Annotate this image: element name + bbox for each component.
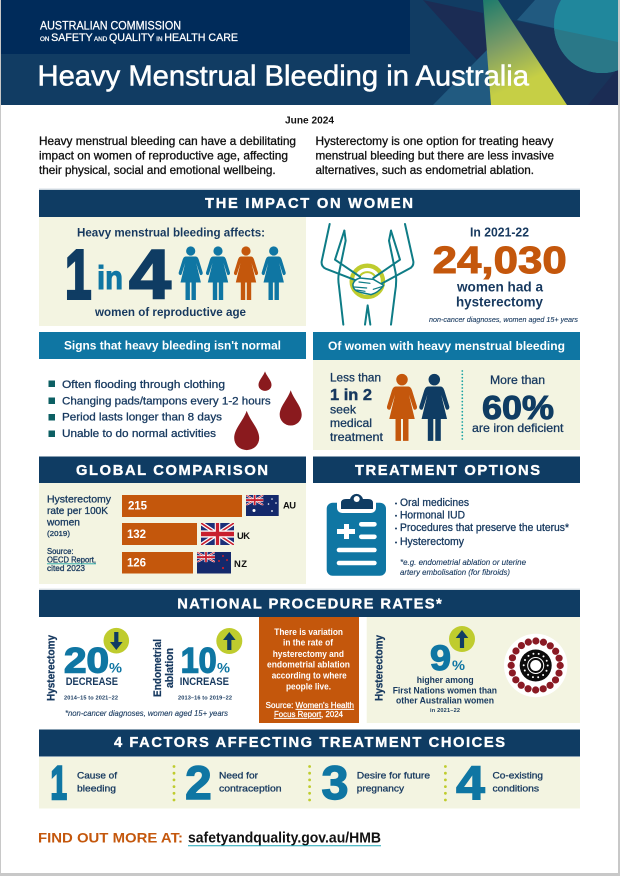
- list: signs: Often flooding through clothing: [62, 379, 225, 391]
- list: signs: Period lasts longer than 8 days: [62, 412, 222, 424]
- flag: New Zealand: [197, 552, 231, 574]
- statistic: 9% higher: other Australian women: [396, 695, 494, 706]
- intro paragraph right: menstrual bleeding but there are less invasive: [316, 150, 554, 163]
- factor 1: cause of bleeding: bleeding: [77, 783, 116, 794]
- factor 2: need for contraception: contraception: [219, 783, 282, 794]
- callout: variation by location: hysterectomy and: [273, 649, 344, 659]
- text: less than 1 in 2: seek: [330, 404, 356, 417]
- section heading: of women with hmb: Of women with heavy menstrual bleeding: [328, 339, 565, 353]
- statistic: 24,030 hysterectomies: hysterectomy: [456, 294, 543, 310]
- factor 4: co-existing conditions: conditions: [492, 783, 539, 794]
- icon: medical clipboard: [327, 494, 386, 576]
- factor 4: co-existing conditions: Co-existing: [492, 769, 543, 780]
- statistic: 9% higher: First Nations women than: [393, 684, 497, 695]
- header geometric artwork: [423, 0, 620, 105]
- bar: NZ 126: [122, 552, 247, 574]
- statistic: 1 in 4: 1: [65, 236, 92, 314]
- statistic: endometrial ablation 10% increase: Endometrial: [152, 639, 164, 697]
- callout: variation by location: [259, 617, 359, 723]
- statistic: endometrial ablation 10% increase: 10: [181, 641, 217, 680]
- list: treatment options: Oral medicines: [400, 497, 469, 509]
- statistic: 60% iron deficient: More than: [490, 373, 545, 387]
- statistic: hysterectomy 20% decrease: %: [109, 659, 123, 675]
- label: hysterectomy rate: Hysterectomy: [47, 495, 112, 506]
- note: non-cancer diagnoses: non-cancer diagnoses, women aged 15+ years: [429, 315, 578, 324]
- section heading: the impact on women: [39, 190, 580, 217]
- statistic: 9% higher: in 2021–22: [430, 708, 460, 714]
- statistic: 1 in 4: 4: [129, 236, 171, 314]
- section heading: global comparison: GLOBAL COMPARISON: [76, 463, 268, 479]
- intro paragraph left: their physical, social and emotional wellbeing.: [39, 164, 276, 177]
- text: less than 1 in 2: treatment: [330, 431, 384, 444]
- note: treatment footnote: *e.g. endometrial ablation or uterine: [400, 558, 527, 567]
- note: treatment footnote: [400, 558, 527, 577]
- intro paragraph left: impact on women of reproductive age, affecting: [39, 150, 288, 163]
- bar: UK 132: 132: [127, 529, 146, 541]
- label: hysterectomy rate: [46, 495, 112, 538]
- section heading: signs: [39, 332, 306, 359]
- source: OECD: [47, 547, 96, 573]
- label: hysterectomy rate: women: [46, 517, 80, 528]
- source: OECD: OECD Report,: [47, 556, 96, 565]
- callout: variation by location: people live.: [286, 681, 331, 691]
- statistic: hysterectomy 20% decrease: Hysterectomy: [46, 635, 58, 701]
- statistic: 1 in 4: in: [97, 259, 123, 296]
- intro paragraph right: alternatives, such as endometrial ablation.: [316, 164, 534, 177]
- callout: variation by location: in the rate of: [283, 638, 333, 648]
- statistic: hysterectomy 20% decrease: [46, 628, 129, 702]
- factor 3: desire for future pregnancy: [322, 756, 430, 809]
- list: signs: Unable to do normal activities: [62, 428, 216, 440]
- statistic: endometrial ablation 10% increase: %: [217, 659, 231, 675]
- factor 1: cause of bleeding: [50, 756, 117, 809]
- callout: variation by location: according to where: [272, 670, 347, 680]
- bar: Australia 215: 215: [128, 500, 148, 512]
- icon: four women, one highlighted: [179, 246, 286, 300]
- factor 2: need for contraception: [185, 756, 282, 809]
- source: Women's Health Focus Report: Source: Women's Health: [266, 701, 354, 710]
- panel: First Nations women: Hysterectomy: [374, 635, 386, 701]
- text: less than 1 in 2: medical: [330, 417, 372, 430]
- list: signs: [48, 379, 271, 440]
- logo text: ON SAFETY AND QUALITY IN HEALTH CARE: [40, 32, 238, 44]
- intro paragraph left: [39, 135, 296, 177]
- bar: NZ 126: 126: [127, 558, 146, 570]
- panel: 1 in 4 women: [39, 217, 306, 326]
- factor 3: desire for future pregnancy: pregnancy: [357, 783, 404, 794]
- statistic: 24,030 hysterectomies: women had a: [456, 279, 543, 295]
- list: treatment options: Hysterectomy: [400, 536, 465, 548]
- panel: treatment seeking and iron deficiency: [313, 360, 580, 450]
- intro paragraph right: Hysterectomy is one option for treating heavy: [316, 135, 554, 148]
- list: treatment options: Procedures that preserve the uterus*: [400, 522, 569, 534]
- icon: two women: [387, 374, 449, 441]
- panel: First Nations women: [367, 617, 580, 723]
- list: treatment options: [395, 497, 569, 548]
- callout: variation by location: endometrial ablation: [267, 660, 350, 670]
- text: less than 1 in 2: [330, 372, 384, 444]
- statistic: 60% iron deficient: are iron deficient: [472, 422, 564, 435]
- statistic: 9% higher: %: [452, 657, 466, 673]
- icon: First Nations dot artwork: [504, 634, 567, 697]
- callout: variation by location: There is variation: [274, 627, 343, 637]
- statistic: hysterectomy 20% decrease: DECREASE: [66, 676, 118, 688]
- factor 2: need for contraception: Need for: [219, 769, 258, 780]
- section heading: treatment options: TREATMENT OPTIONS: [355, 463, 540, 479]
- section heading: the impact on women: THE IMPACT ON WOMEN: [205, 196, 413, 212]
- source: Women's Health Focus Report: [266, 701, 354, 719]
- bar: Australia 215: [122, 495, 296, 517]
- factor 1: cause of bleeding: 1: [50, 756, 67, 809]
- flag: Australia: [246, 495, 279, 516]
- source: Women's Health Focus Report: Focus Report, 2024: [274, 710, 344, 719]
- factor 1: cause of bleeding: Cause of: [77, 769, 117, 780]
- flag: UK: [201, 523, 234, 545]
- bar: UK 132: [122, 523, 250, 545]
- statistic: 9% higher: [393, 639, 497, 714]
- footer: find out more: FIND OUT MORE AT:: [38, 830, 183, 846]
- icon: up arrow: [216, 628, 242, 654]
- section heading: of women with hmb: [313, 332, 580, 360]
- statistic: 60% iron deficient: [472, 373, 564, 435]
- statistic: hysterectomy 20% decrease: 2014–15 to 2021–22: [64, 696, 118, 702]
- header banner: [1, 0, 620, 105]
- list: treatment options: Hormonal IUD: [400, 509, 465, 521]
- icon: up arrow: [449, 626, 475, 652]
- intro paragraph right: [316, 135, 554, 177]
- note: treatment footnote: artery embolisation (for fibroids): [400, 568, 510, 577]
- source: OECD: Source:: [47, 547, 74, 556]
- statistic: endometrial ablation 10% increase: 2013–16 to 2019–22: [178, 696, 232, 702]
- label: hysterectomy rate: (2019): [47, 529, 70, 538]
- logo text: [40, 20, 238, 44]
- icon: blood drops: [234, 371, 302, 450]
- text: less than 1 in 2: 1 in 2: [330, 387, 372, 404]
- section heading: treatment options: [313, 456, 580, 483]
- section heading: national procedure rates: [39, 590, 580, 617]
- section heading: 4 factors: 4 FACTORS AFFECTING TREATMENT CHOICES: [114, 735, 505, 751]
- statistic: endometrial ablation 10% increase: [152, 628, 242, 702]
- statistic: hysterectomy 20% decrease: 20: [64, 641, 109, 680]
- heading: affects: Heavy menstrual bleeding affects:: [77, 226, 265, 240]
- footer: find out more: safetyandquality.gov.au/HMB: [188, 831, 381, 847]
- factor 2: need for contraception: 2: [185, 756, 212, 809]
- label: hysterectomy rate: rate per 100K: [47, 506, 108, 517]
- logo text: AUSTRALIAN COMMISSION: [40, 20, 181, 32]
- statistic: 60% iron deficient: 60%: [482, 389, 554, 426]
- statistic: 9% higher: higher among: [417, 674, 474, 685]
- icon: down arrow: [104, 628, 129, 654]
- statistic: endometrial ablation 10% increase: INCREASE: [180, 676, 229, 688]
- section heading: global comparison: [39, 456, 306, 483]
- bar: NZ 126: NZ: [234, 558, 247, 569]
- factor 4: co-existing conditions: [456, 756, 543, 809]
- statistic: 24,030 hysterectomies: In 2021-22: [470, 226, 529, 240]
- factor 3: desire for future pregnancy: 3: [322, 756, 348, 809]
- source: OECD: cited 2023: [47, 564, 85, 573]
- statistic: 24,030 hysterectomies: [429, 226, 578, 324]
- icon: hands over abdomen: [322, 224, 413, 325]
- factor 3: desire for future pregnancy: Desire for future: [357, 769, 430, 780]
- statistic: 24,030 hysterectomies: 24,030: [433, 240, 567, 282]
- factor 4: co-existing conditions: 4: [456, 756, 485, 809]
- bar: Australia 215: AU: [283, 500, 296, 511]
- section heading: national procedure rates: NATIONAL PROCEDURE RATES*: [177, 596, 442, 612]
- statistic: endometrial ablation 10% increase: ablation: [164, 648, 176, 688]
- statistic: 1 in 4: [65, 236, 171, 314]
- section heading: signs: Signs that heavy bleeding isn't normal: [64, 339, 281, 353]
- section heading: 4 factors: [39, 730, 580, 756]
- caption: women of reproductive age: women of reproductive age: [94, 305, 246, 319]
- title: Heavy Menstrual Bleeding in Australia: [38, 61, 529, 93]
- bar: UK 132: UK: [237, 530, 250, 541]
- list: signs: Changing pads/tampons every 1-2 hours: [62, 396, 271, 408]
- text: less than 1 in 2: Less than: [330, 372, 381, 385]
- statistic: 9% higher: 9: [430, 639, 451, 678]
- note: national rates footnote: *non-cancer diagnoses, women aged 15+ years: [65, 709, 228, 718]
- footer: find out more: [38, 830, 381, 847]
- date: June 2024: [285, 116, 334, 127]
- panel: global comparison: [39, 483, 306, 584]
- panel: 4 factors: [39, 756, 580, 809]
- intro paragraph left: Heavy menstrual bleeding can have a debilitating: [39, 135, 296, 148]
